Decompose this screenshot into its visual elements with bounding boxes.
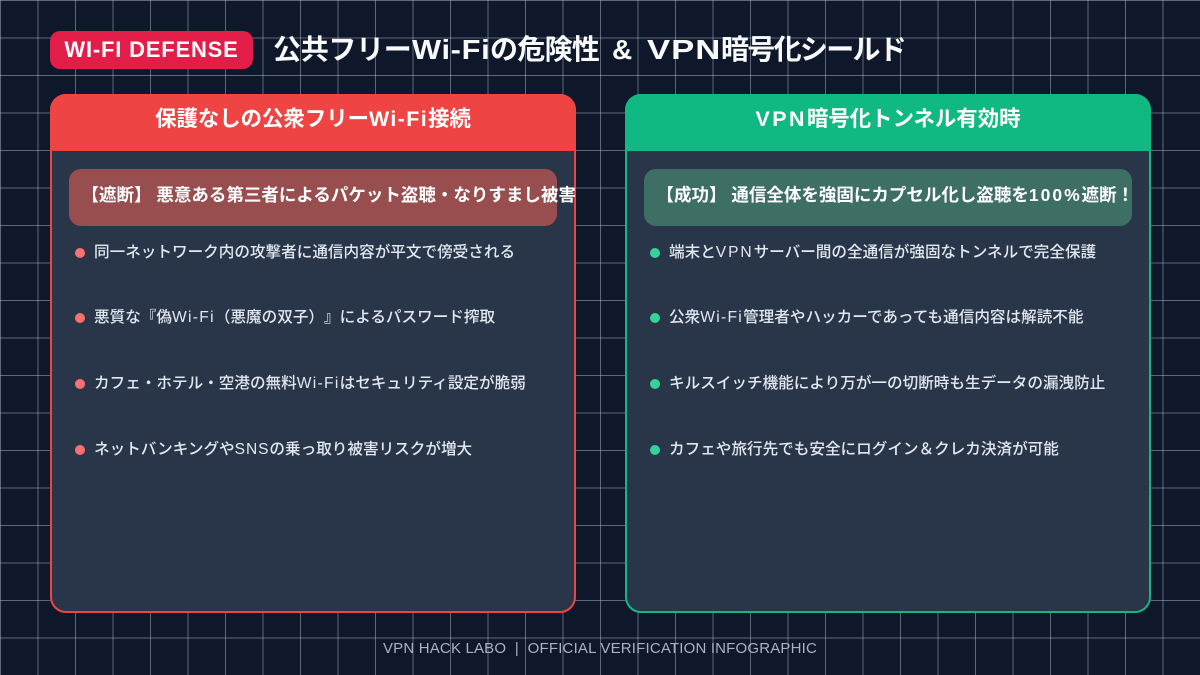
badge: Wi-Fi Defense: WI-FI DEFENSE <box>64 37 239 62</box>
panel: unprotected public Wi-Fi <box>50 94 576 613</box>
badge: Wi-Fi Defense <box>50 31 253 69</box>
list item 2: 公衆Wi-Fi管理者やハッカーであっても通信内容は解読不能 <box>669 309 1084 326</box>
panel heading: unprotected <box>50 94 576 151</box>
list item 4: ネットバンキングやSNSの乗っ取り被害リスクが増大 <box>94 441 472 458</box>
list item 4: カフェや旅行先でも安全にログイン＆クレカ決済が可能 <box>669 441 1059 458</box>
callout: blocked: 【遮断】 悪意ある第三者によるパケット盗聴・なりすまし被害 <box>82 185 576 205</box>
list item 3: キルスイッチ機能により万が一の切断時も生データの漏洩防止 <box>669 375 1105 392</box>
title <box>273 34 905 65</box>
panel heading: VPN tunnel <box>625 94 1151 151</box>
title: & <box>612 34 632 65</box>
title: VPN <box>647 34 721 65</box>
panel heading: unprotected: 保護なしの公衆フリーWi-Fi接続 <box>155 107 471 131</box>
list item 2: 悪質な『偽Wi-Fi（悪魔の双子）』によるパスワード搾取 <box>94 309 495 326</box>
panel heading: VPN tunnel: VPN暗号化トンネル有効時 <box>756 107 1020 131</box>
list item 1: 端末とVPNサーバー間の全通信が強固なトンネルで完全保護 <box>669 244 1096 261</box>
footer: VPN HACK LABO | OFFICIAL VERIFICATION INFOGRAPHIC <box>383 640 817 657</box>
panel: VPN tunnel enabled <box>625 94 1151 613</box>
callout: blocked <box>69 169 557 226</box>
title: 公共フリー <box>273 34 412 65</box>
list item 3: カフェ・ホテル・空港の無料Wi-Fiはセキュリティ設定が脆弱 <box>94 375 526 392</box>
title: Wi-Fi <box>412 34 490 65</box>
callout: success <box>644 169 1132 226</box>
list item 1: 同一ネットワーク内の攻撃者に通信内容が平文で傍受される <box>94 244 515 261</box>
callout: success: 【成功】 通信全体を強固にカプセル化し盗聴を100%遮断！ <box>656 185 1134 205</box>
title: の危険性 <box>490 34 599 65</box>
title: 暗号化シールド <box>721 34 905 65</box>
